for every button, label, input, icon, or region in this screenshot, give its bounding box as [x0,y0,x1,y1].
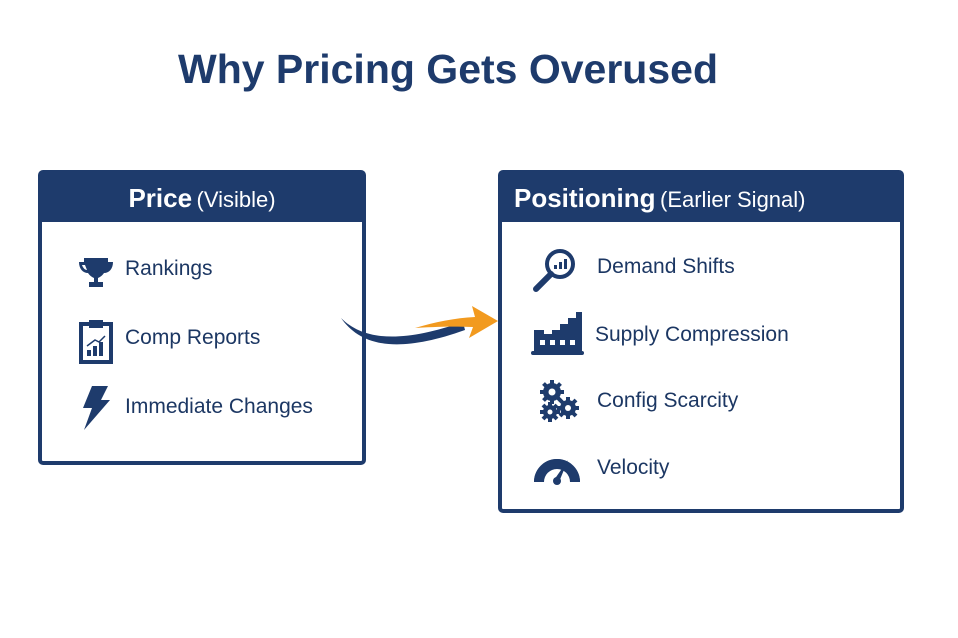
icon: magnifier [533,249,575,292]
item: supply compression [531,312,789,355]
icon: gears [540,380,579,422]
icon: factory [531,312,584,355]
icon: lightning [83,386,110,430]
item: supply compression: Supply Compression [595,323,789,346]
icon: clipboard [79,320,113,364]
icon: trophy [79,258,113,287]
item: velocity: Velocity [597,456,669,479]
item: config scarcity: Config Scarcity [597,389,738,412]
panel: price [38,170,366,465]
item: immediate changes: Immediate Changes [125,395,313,418]
item: immediate changes [83,386,313,430]
item: config scarcity [540,380,738,422]
heading: price [42,174,362,222]
item: demand shifts [533,249,735,292]
icon: speedometer [534,459,580,485]
item: rankings: Rankings [125,257,213,280]
heading: positioning [502,174,900,222]
item: comp reports [79,320,260,364]
panel: positioning [498,170,904,513]
title: Why Pricing Gets Overused [178,46,718,92]
item: comp reports: Comp Reports [125,326,260,349]
item: rankings [79,257,213,287]
arrow [341,306,498,344]
heading: price: Price (Visible) [128,183,276,213]
item: demand shifts: Demand Shifts [597,255,735,278]
item: velocity [534,456,670,485]
heading: positioning: Positioning (Earlier Signal) [514,183,806,213]
